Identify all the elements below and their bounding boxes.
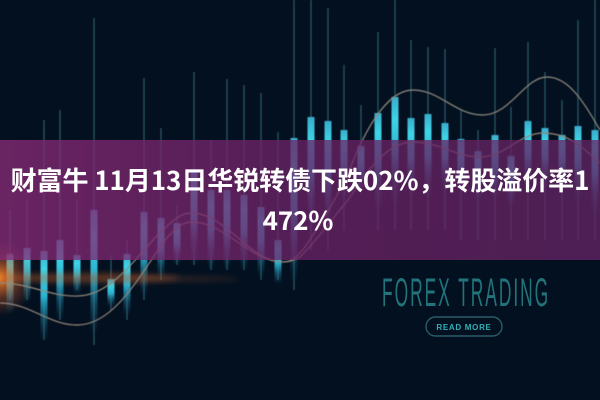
purple title band: [0, 140, 600, 260]
orange glow and light streak: [0, 240, 240, 316]
forex trading heading: FOREX TRADING: [382, 271, 548, 315]
title: 财富牛 11月13日华锐转债下跌02%，转股溢价率1: [11, 161, 589, 198]
trend curves: [0, 77, 600, 325]
title: [11, 161, 589, 238]
title: 472%: [263, 201, 333, 238]
read more button: READ MORE: [436, 323, 492, 332]
read more button: [426, 317, 502, 336]
